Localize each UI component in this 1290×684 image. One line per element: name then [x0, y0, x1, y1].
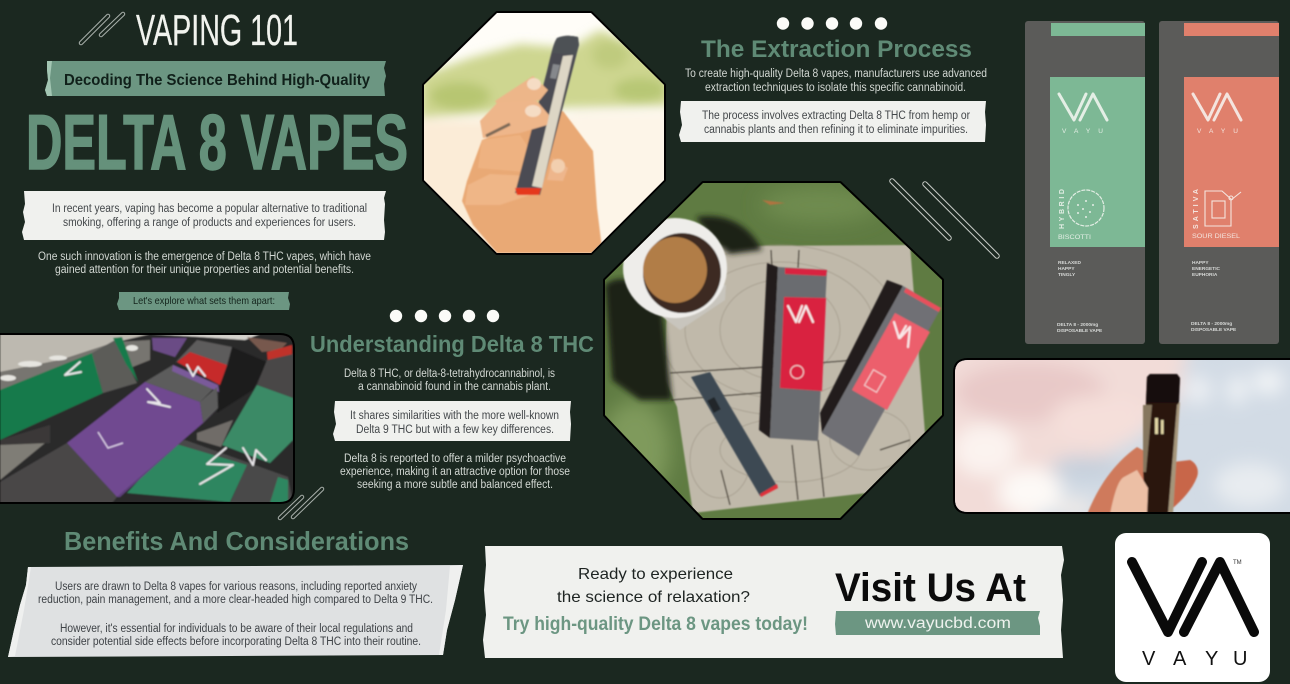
effects red: DELTA 8 - 2000mg: [1191, 321, 1232, 327]
flavour name green: BISCOTTI: [1058, 234, 1091, 241]
heading: The Extraction Process: The Extraction Process: [701, 36, 972, 63]
effects red: HAPPY: [1192, 260, 1209, 266]
icon: jerry can: [1205, 191, 1241, 226]
benefits paper: reduction, pain management, and a more clear-headed high compared to Delta 9 THC.: [38, 594, 433, 606]
logo: Vayu: V: [1142, 648, 1156, 670]
CTA question: the science of relaxation?: [557, 589, 750, 606]
CTA question: Ready to experience: [578, 566, 733, 583]
benefits paper: However, it's essential for individuals to be aware of their local regulations and: [60, 623, 413, 635]
title: Vaping 101: VAPING 101: [136, 6, 298, 55]
benefits paper: Users are drawn to Delta 8 vapes for various reasons, including reported anxiety: [55, 581, 417, 593]
logo: Vayu: TM: [1233, 560, 1242, 566]
strain label rotated green: HYBRID: [1059, 189, 1066, 229]
subtitle banner: Decoding The Science Behind High-Quality: [64, 72, 370, 89]
extraction body text: extraction techniques to isolate this specific cannabinoid.: [705, 82, 966, 94]
photo: vape in hand, octagon: [420, 10, 670, 262]
heading: Understanding Delta 8 THC: Understanding Delta 8 THC: [310, 331, 594, 357]
photo: vape against sky: [953, 358, 1290, 514]
photo: coffee, boxes and vape on stump, octagon: [600, 180, 945, 522]
logo on green box: [1059, 94, 1107, 120]
section dots: understanding: [390, 310, 499, 322]
main title: Delta 8 Vapes: DELTA 8 VAPES: [26, 98, 408, 186]
understanding paper: Delta 9 THC but with a few key differences.: [356, 424, 554, 436]
Visit us heading: Visit Us At: [835, 566, 1026, 610]
CTA question: [557, 566, 750, 606]
extraction paper: The process involves extracting Delta 8 THC from hemp or: [702, 110, 970, 122]
intro paper: In recent years, vaping has become a popular alternative to traditional: [52, 203, 367, 215]
effects green: DELTA 8 - 2000mg: [1057, 322, 1098, 328]
extraction paper: cannabis plants and then refining it to eliminate impurities.: [704, 124, 968, 136]
understanding body text 2: experience, making it an attractive option for those: [340, 466, 570, 478]
benefits paper: consider potential side effects before incorporating Delta 8 THC into their routine.: [51, 636, 421, 648]
intro paper: smoking, offering a range of products and experiences for users.: [63, 217, 356, 229]
CTA green line: Try high-quality Delta 8 vapes today!: [503, 614, 808, 635]
understanding body text 1: [344, 368, 555, 393]
extraction paper: [679, 101, 986, 142]
effects red: DISPOSABLE VAPE: [1191, 327, 1237, 333]
effects red: EUPHORIA: [1192, 272, 1218, 278]
benefits paper: [8, 565, 463, 657]
strain label rotated red: SATIVA: [1193, 189, 1200, 229]
effects red: [1191, 260, 1237, 333]
call to action paper: [483, 546, 1064, 658]
URL banner: www.vayucbd.com: [864, 615, 1011, 632]
understanding paper: [333, 401, 571, 441]
intro body text: [38, 251, 371, 276]
brand on red box: VAYU: [1197, 128, 1238, 135]
intro paper: [22, 191, 386, 240]
logo: Vayu: [1115, 533, 1270, 682]
logo: Vayu: Y: [1205, 648, 1218, 670]
logo: Vayu: U: [1233, 648, 1247, 670]
subtitle banner: [45, 61, 386, 96]
product box: green hybrid biscotti: [1025, 21, 1145, 344]
logo on red box: [1193, 94, 1241, 120]
heading: Benefits And Considerations: Benefits And Considerations: [64, 526, 409, 556]
understanding body text 2: [340, 453, 570, 491]
decorative capsules right: [892, 181, 997, 256]
photo: stack of product boxes: [0, 333, 295, 504]
effects green: TINGLY: [1058, 272, 1076, 278]
URL banner: [835, 611, 1040, 635]
intro body text: One such innovation is the emergence of Delta 8 THC vapes, which have: [38, 251, 371, 263]
icon: biscuit: [1068, 190, 1104, 226]
flavour name red: SOUR DIESEL: [1192, 233, 1240, 240]
section dots: extraction: [777, 17, 887, 30]
understanding body text 2: Delta 8 is reported to offer a milder psychoactive: [344, 453, 566, 465]
brand on green box: VAYU: [1062, 128, 1103, 135]
extraction body text: [685, 68, 987, 94]
effects green: HAPPY: [1058, 266, 1075, 272]
effects green: DISPOSABLE VAPE: [1057, 328, 1103, 334]
understanding paper: It shares similarities with the more well-known: [350, 410, 559, 422]
logo: Vayu: A: [1173, 648, 1187, 670]
effects red: ENERGETIC: [1192, 266, 1221, 272]
intro body text: gained attention for their unique properties and potential benefits.: [55, 264, 354, 276]
decorative capsules top left: [81, 14, 123, 43]
understanding body text 1: a cannabinoid found in the cannabis plant.: [358, 381, 551, 393]
decorative capsules lower: [280, 489, 322, 518]
understanding body text 2: seeking a more subtle and balanced effect.: [357, 479, 553, 491]
effects green: RELAXED: [1058, 260, 1081, 266]
effects green: [1057, 260, 1103, 334]
product box: red sativa sour diesel: [1159, 21, 1279, 344]
callout: explore: [117, 292, 290, 310]
extraction body text: To create high-quality Delta 8 vapes, manufacturers use advanced: [685, 68, 987, 80]
understanding body text 1: Delta 8 THC, or delta-8-tetrahydrocannabinol, is: [344, 368, 555, 380]
callout: explore: Let's explore what sets them apart:: [133, 295, 275, 307]
